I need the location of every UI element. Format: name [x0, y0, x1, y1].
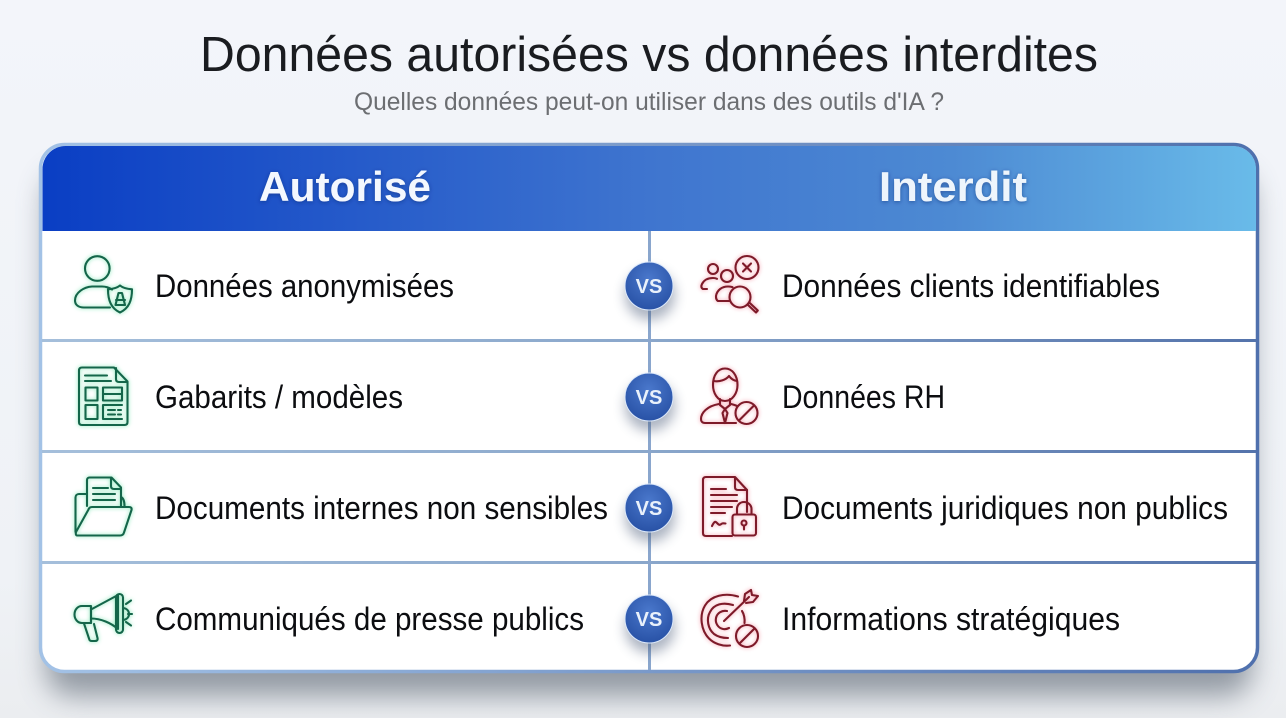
- header: Interdit: Interdit: [879, 163, 1027, 210]
- vs badge: VS: [636, 609, 662, 631]
- icon: HR person prohibited: [701, 368, 758, 424]
- comparison table panel: [40, 144, 1258, 672]
- vs badge: [625, 373, 675, 431]
- label: Données clients identifiables: [782, 268, 1160, 304]
- icon: person with shield: [75, 256, 132, 312]
- table header: [42, 146, 1256, 231]
- icon: megaphone: [74, 594, 132, 641]
- row 2: [79, 368, 945, 431]
- label: Documents internes non sensibles: [155, 490, 608, 526]
- label: Gabarits / modèles: [155, 379, 403, 415]
- vs badge: [625, 262, 675, 320]
- label: Documents juridiques non publics: [782, 490, 1228, 526]
- vs badge: [625, 484, 675, 542]
- label: Données anonymisées: [155, 268, 454, 304]
- icon: template document: [79, 368, 128, 425]
- label: Informations stratégiques: [782, 601, 1120, 637]
- label: Données RH: [782, 379, 945, 415]
- vs badge: VS: [636, 387, 662, 409]
- row 1: [75, 256, 1160, 320]
- vs badge: VS: [636, 276, 662, 298]
- icon: legal document with lock: [703, 477, 756, 536]
- subtitle: Quelles données peut-on utiliser dans des outils d'IA ?: [354, 88, 944, 116]
- vs badge: VS: [636, 498, 662, 520]
- title: Données autorisées vs données interdites: [200, 28, 1098, 82]
- vs badge: [625, 595, 675, 653]
- icon: folder with document: [76, 478, 132, 536]
- header: Autorisé: Autorisé: [259, 163, 431, 210]
- row 3: [76, 477, 1228, 542]
- icon: identifiable clients: [701, 256, 758, 312]
- row 4: [74, 590, 1120, 653]
- label: Communiqués de presse publics: [155, 601, 584, 637]
- icon: target prohibited: [702, 590, 758, 647]
